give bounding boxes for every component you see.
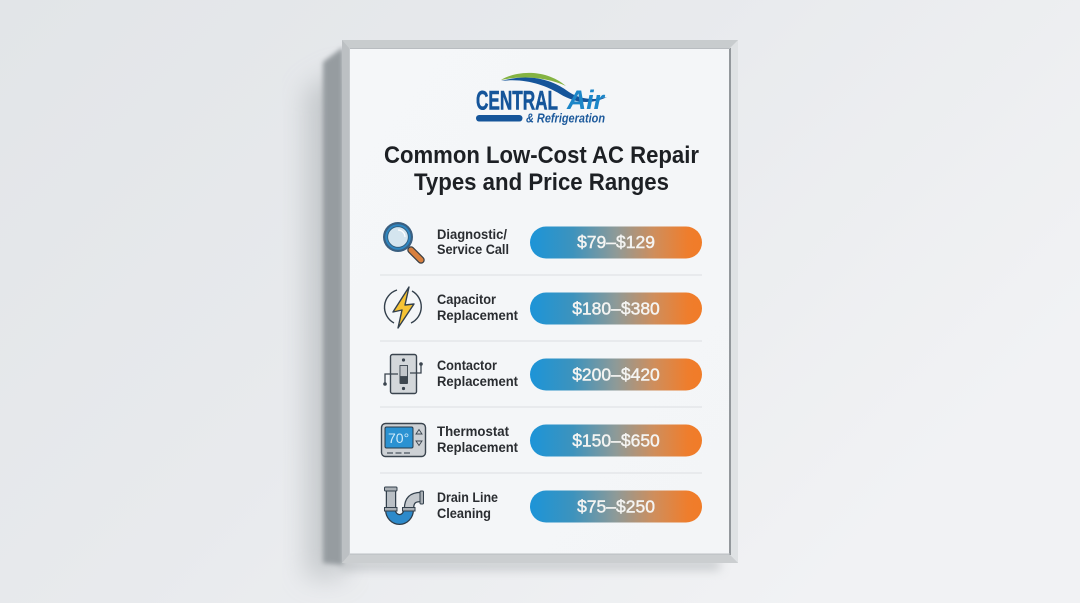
logo: Central Air & Refrigeration: & Refrigeration	[526, 112, 605, 126]
icon: lightning bolt	[385, 287, 421, 328]
icon: magnifying glass	[383, 222, 421, 260]
poster frame	[342, 40, 738, 563]
label: Drain Line	[437, 490, 498, 505]
icon: thermostat: 70°	[388, 430, 409, 446]
row: diagnostic: Service Call	[437, 242, 509, 257]
row: drain line	[384, 487, 702, 522]
logo: Central Air & Refrigeration	[476, 73, 607, 126]
label: Thermostat	[437, 424, 509, 439]
icon: thermostat	[382, 424, 426, 456]
price pill: $200–$420	[572, 364, 660, 384]
price pill	[530, 424, 702, 456]
price pill: $180–$380	[572, 298, 660, 318]
title: Common Low-Cost AC Repair	[384, 142, 699, 169]
price pill: $150–$650	[572, 430, 660, 450]
label: Capacitor	[437, 292, 497, 307]
icon: p-trap pipe	[384, 487, 424, 520]
row: thermostat: Replacement	[437, 440, 518, 455]
logo: Central Air & Refrigeration: Air	[566, 85, 605, 115]
title: Types and Price Ranges	[414, 169, 669, 196]
label: Contactor	[437, 358, 498, 373]
row: contactor: Replacement	[437, 374, 518, 389]
row: contactor	[383, 354, 702, 394]
price pill	[530, 358, 702, 390]
icon: switch	[383, 354, 423, 394]
frame shadow	[306, 47, 720, 578]
row: capacitor	[385, 287, 702, 328]
price pill: $75–$250	[577, 496, 655, 516]
row: capacitor: Replacement	[437, 308, 518, 323]
price pill	[530, 226, 702, 258]
price pill	[530, 292, 702, 324]
label: Diagnostic/	[437, 227, 507, 242]
logo: Central Air & Refrigeration: CENTRAL	[476, 86, 558, 116]
price pill: $79–$129	[577, 232, 655, 252]
row: thermostat	[382, 424, 702, 456]
title	[384, 142, 699, 196]
price pill	[530, 490, 702, 522]
row: diagnostic	[383, 222, 702, 260]
row: drain line: Cleaning	[437, 506, 491, 521]
